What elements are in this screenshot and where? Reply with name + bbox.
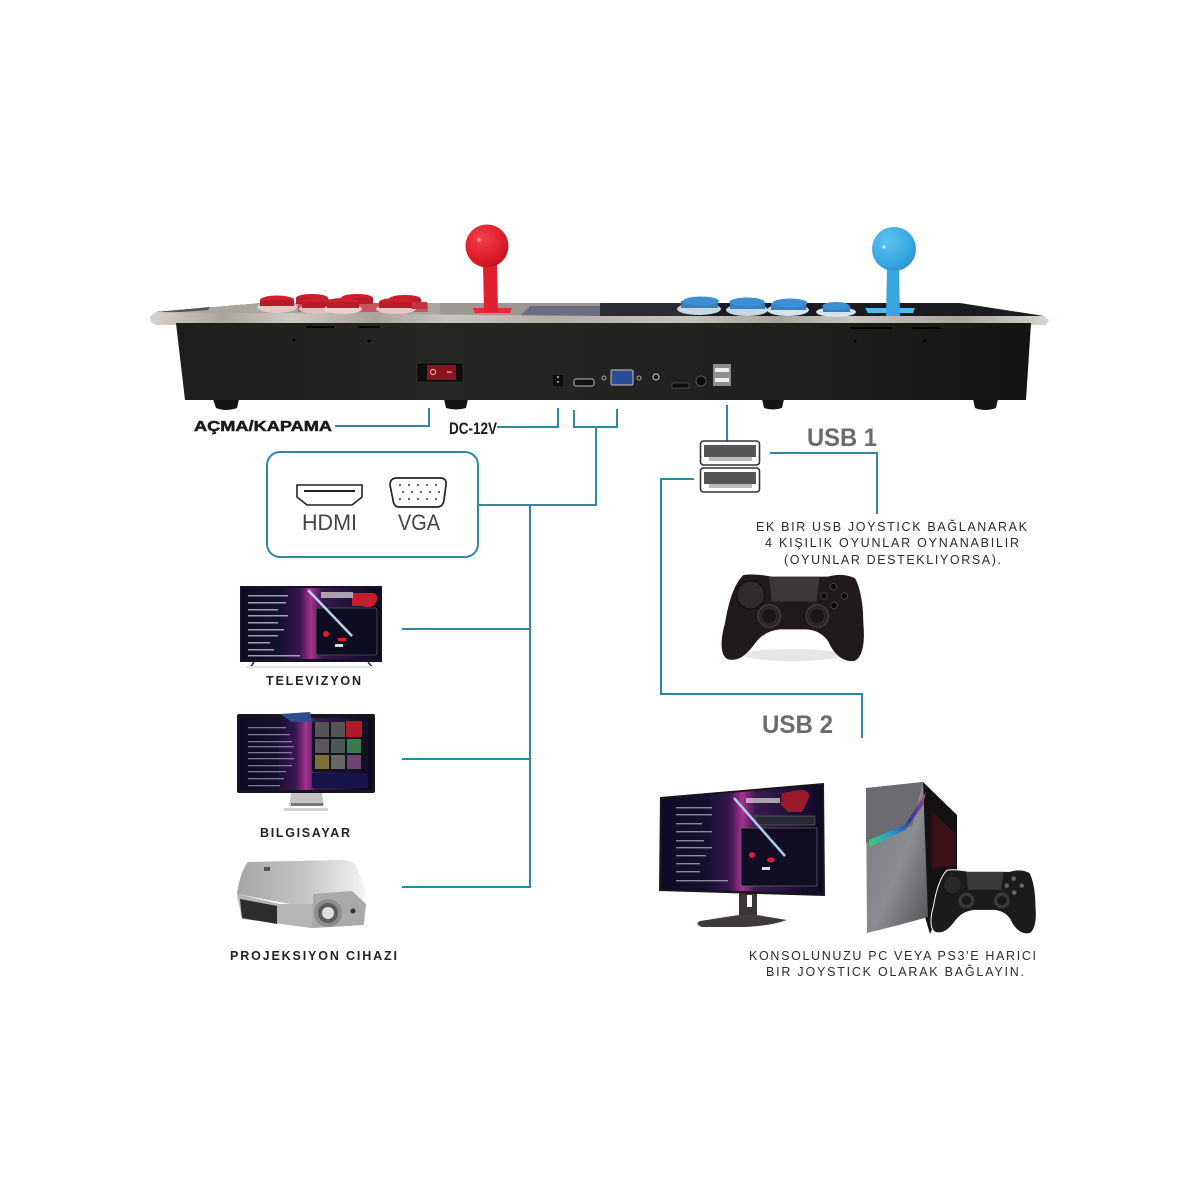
connector lines: video outputs [402,409,617,888]
PC front [866,782,928,933]
monitor menu [676,807,728,881]
panel: HDMI and VGA [267,452,478,557]
small gamepad controls [944,877,1024,908]
arcade console [150,224,1049,410]
monitor menu [248,727,294,786]
text: PC connection note: KONSOLUNUZU PC VEYA PS3'E HARICI [749,949,1036,963]
heading: USB 1: USB 1 [807,424,877,452]
label: television: TELEVIZYON [266,674,361,688]
gamepad shadow [743,649,843,661]
gamepad touchpad [769,577,819,602]
label: computer: BILGISAYAR [260,826,350,840]
projector front [237,894,366,928]
micro USB port [672,383,689,388]
TV menu [248,595,300,656]
USB ports [713,364,731,386]
label: power switch [194,408,429,435]
monitor stand [289,793,324,806]
PC tower [866,782,957,934]
gamepad body [722,574,864,661]
connector: USB 1 [770,453,877,514]
monitor screen [659,783,825,896]
top surface [156,303,1044,320]
screw holes [292,326,940,342]
gamepad d-pad [737,581,765,609]
projector lens housing [312,891,366,928]
steel edge band [150,312,1049,325]
monitor streak [734,798,785,856]
TV streak [308,590,352,636]
label: DC power [449,408,558,438]
HDMI port [574,379,594,386]
label: power switch: AÇMA/KAPAMA [194,418,332,435]
monitor stand [739,892,757,917]
small gamepad [931,870,1036,934]
connector: USB 2 [661,479,862,738]
console feet [213,399,998,410]
projector lens [314,899,342,927]
text: USB joystick note: EK BIR USB JOYSTICK BAĞLANARAK [756,519,1028,534]
text: USB joystick note: (OYUNLAR DESTEKLIYORSA). [784,553,1001,567]
small gamepad touchpad [966,872,1003,890]
icon: USB ports [700,441,760,492]
blue buttons [677,296,856,317]
red joystick [466,224,512,313]
HDMI text: HDMI [302,510,357,535]
icon: VGA [390,478,446,507]
label: projector: PROJEKSIYON CIHAZI [230,949,397,963]
TV preview box [316,608,377,655]
audio port [653,374,659,380]
gamepad buttons [821,583,848,609]
jack port [696,376,706,386]
monitor tiles [312,721,368,788]
projector vent [240,899,277,924]
blue joystick [865,227,916,316]
red buttons [257,294,428,314]
monitor logo [781,790,809,812]
VGA text: VGA [398,510,440,535]
DC jack [553,375,563,386]
VGA port [602,370,641,385]
desktop monitor [659,783,825,927]
computer monitor [237,712,375,811]
gamepad [722,574,864,661]
console body [176,323,1031,400]
connector: USB hub line [726,405,728,441]
heading: USB 2: USB 2 [762,711,833,739]
projector [237,860,366,928]
power switch [417,363,463,382]
icon: HDMI [297,485,362,505]
text: PC connection note [749,949,1036,979]
text: USB joystick note: 4 KIŞILIK OYUNLAR OYNANABILIR [765,536,1019,550]
monitor preview box [741,828,817,886]
projector top [237,860,366,904]
television [240,586,382,668]
PC light strip [869,792,926,847]
gamepad sticks [758,605,781,627]
TV game logo [352,593,377,607]
text: PC connection note: BIR JOYSTICK OLARAK BAĞLAYIN. [766,964,1024,979]
TV screen [240,586,382,662]
PC top front [866,782,923,843]
monitor screen [237,714,375,793]
text: USB joystick note [756,519,1028,567]
label: DC power: DC-12V [449,419,498,438]
TV legs [250,662,373,668]
small gamepad body [931,870,1036,934]
PC side panel [923,782,957,934]
